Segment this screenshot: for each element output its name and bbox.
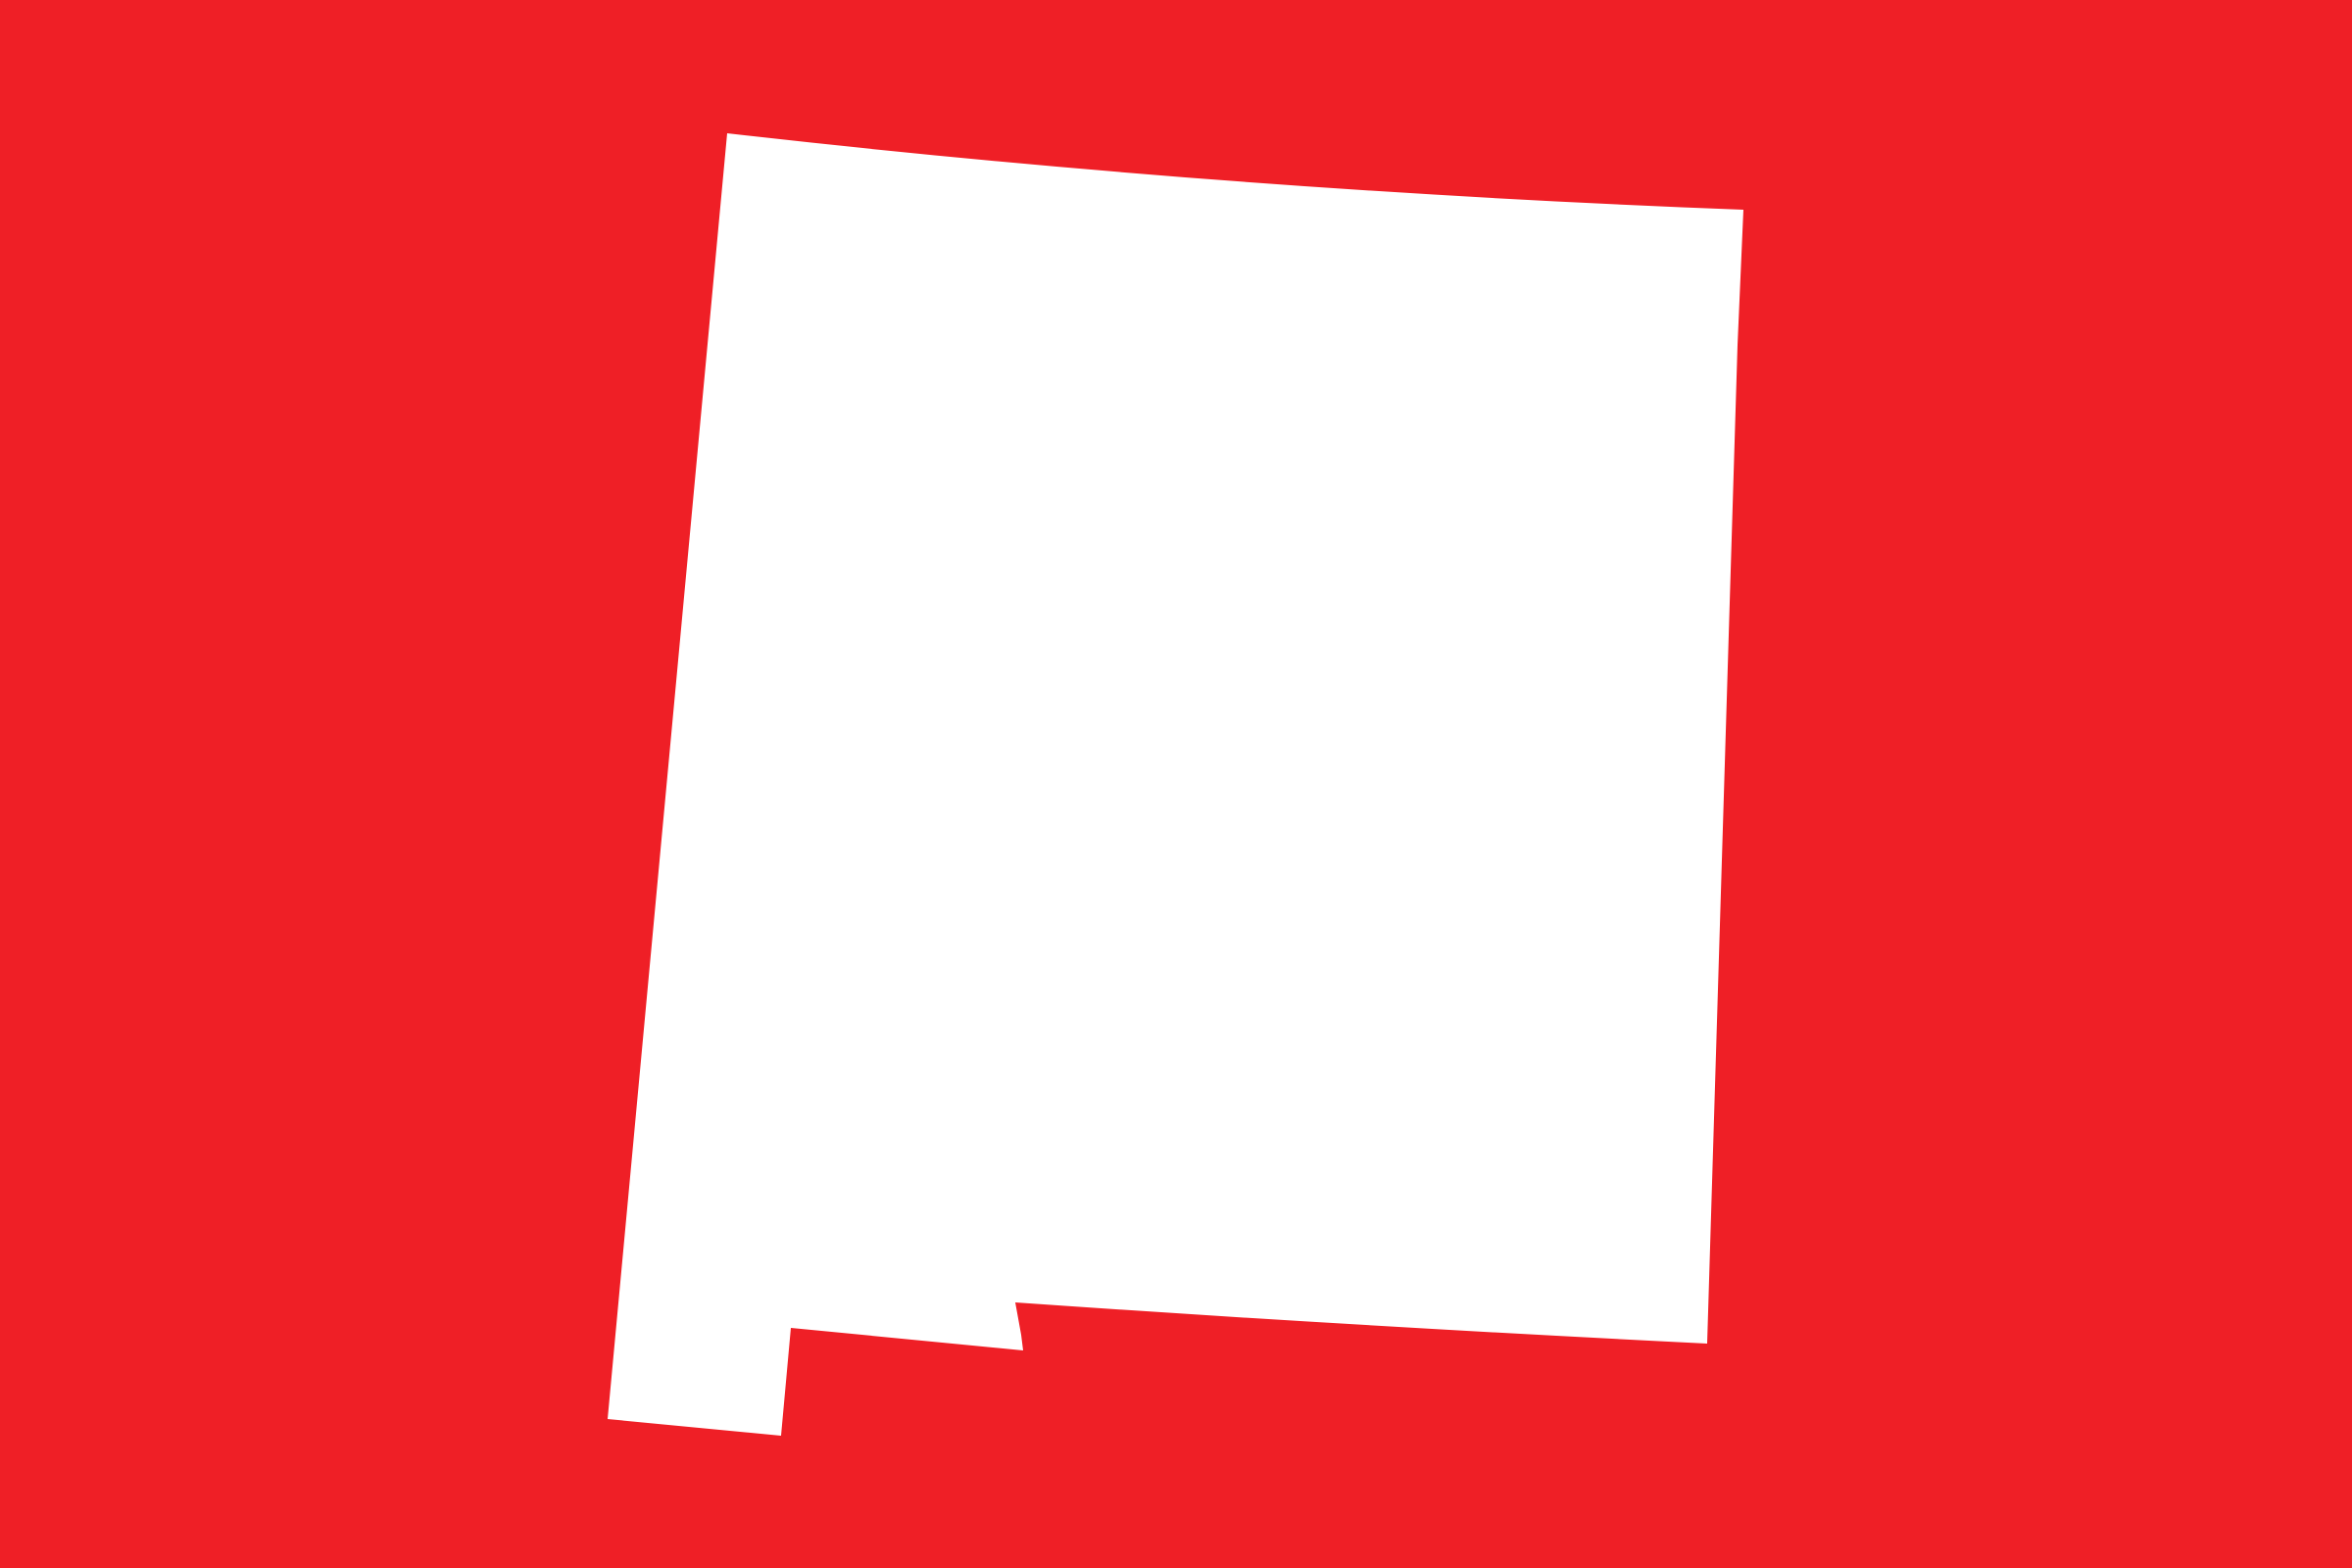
icon: white state shape — [608, 133, 1743, 1436]
